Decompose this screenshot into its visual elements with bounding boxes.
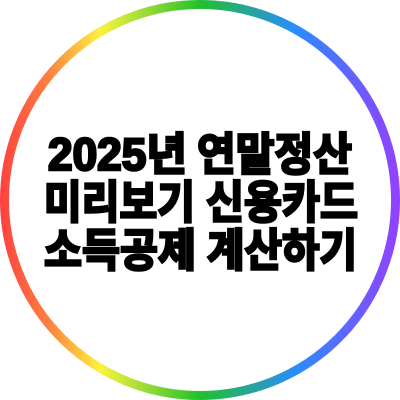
title line 1 [48,129,352,180]
title line 2: 신용카드 [206,177,358,228]
title line 3: 계산하기 [207,225,357,276]
title line 3: 소득공제 [44,225,196,276]
title line 1: 연말정산 [197,129,352,180]
title line 2 [44,177,358,228]
title line 3 [44,225,357,276]
title line 2: 미리보기 [44,177,195,228]
title line 1: 2025년 [48,129,187,180]
title [44,129,358,276]
